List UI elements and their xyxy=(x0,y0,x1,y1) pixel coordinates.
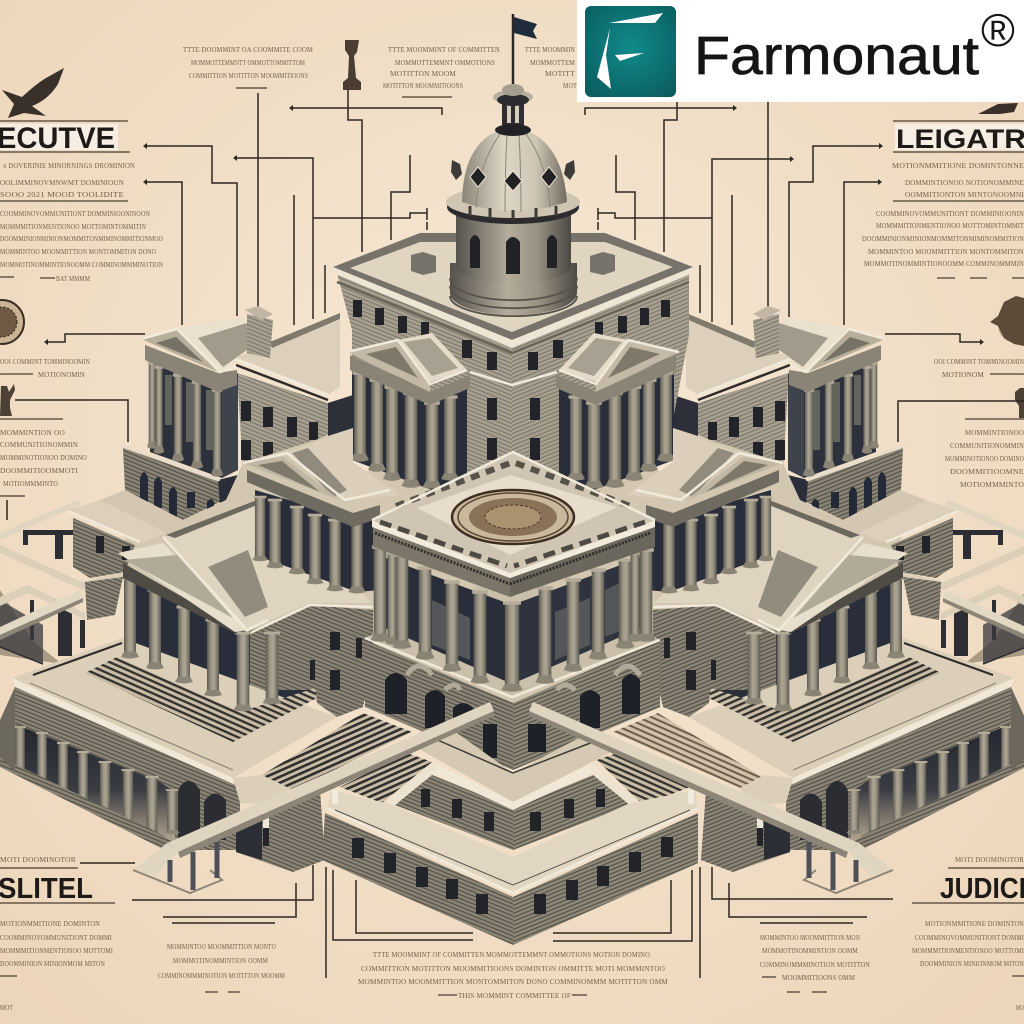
text block: bottom right center copy: MOMMINTOO MOOMMITTION MON xyxy=(760,933,860,942)
icon: lamp xyxy=(0,384,15,416)
icon: right lamp xyxy=(1015,388,1024,418)
text block: executive: BAT MMMM xyxy=(56,274,90,283)
upper tier walls xyxy=(395,775,513,850)
lower side block right xyxy=(701,790,790,872)
text block: top left: MOMMOTTEMMNTT OMMOTTOMMITTOM xyxy=(191,58,305,67)
text block: bottom left heading and copy: MOTI DOOMINOTOR xyxy=(0,855,76,864)
stairs lower right xyxy=(597,752,690,805)
panel: legislative xyxy=(862,103,1024,489)
icon: seal xyxy=(0,300,24,344)
lower roof xyxy=(327,790,698,893)
text block: top center: TTTE MOOMMINT OF COMMITTEN xyxy=(388,45,500,54)
text block: bottom left heading and copy: DOOMMINION MINIONMOM MITON xyxy=(0,959,105,968)
text block: executive: MOMMOTINOMMINTIONOOMM COMMINOMMMINOTION xyxy=(0,260,163,269)
mid porch right xyxy=(626,428,783,594)
text block: bottom right heading and copy xyxy=(912,855,1024,1012)
text block: lower legislative: DOOMMITIOOMNE xyxy=(950,467,1024,476)
pediment xyxy=(123,563,237,634)
text block: executive: MOMMMITIONMENTIONOO MOTTOMINTOMMITIN xyxy=(0,222,146,231)
text block: lower executive: MOMMINOTIONOO DOMINO xyxy=(0,453,87,462)
central block xyxy=(365,452,660,770)
lower side block left xyxy=(236,790,325,872)
text block: legislative xyxy=(862,161,1024,278)
logo block xyxy=(577,0,1024,102)
lower wing right xyxy=(653,500,1024,850)
text block: top right: MOMMOTTEM xyxy=(530,58,575,67)
chimney left xyxy=(411,252,436,275)
icon: eagle xyxy=(2,68,64,118)
wing roof xyxy=(163,500,373,630)
text block: lower legislative: MOTIONOM xyxy=(942,370,984,379)
text block: lower legislative: MOTIOMMMINTO xyxy=(960,480,1024,489)
text block: bottom left center copy: COMMINOMMMINOTION MOTITTON MOOMM xyxy=(158,971,285,980)
text block: legislative: MOTIONMMITIONE DOMINTONNE xyxy=(892,161,1024,170)
text block: top center xyxy=(383,45,500,97)
registered mark: ® xyxy=(981,4,1015,56)
text block: bottom left center copy xyxy=(158,942,285,992)
back wing right xyxy=(673,306,906,520)
text block: bottom left heading and copy: COOMMINOVOMMUNITIONT DOMMI xyxy=(0,933,112,942)
ramp beam left xyxy=(133,702,494,893)
text block: bottom left center copy: MOMMOTINOMMINTION OOMM xyxy=(173,956,268,965)
text block: bottom right center copy: MOMMOTINOMMINTION OOMM xyxy=(762,946,858,955)
text block: top center: MOTITTON MOOM xyxy=(390,69,456,78)
text block: top center: MOMMOTTEMMNT OMMOTIONS xyxy=(395,58,495,67)
ramp stairs upper right xyxy=(613,713,762,788)
flag xyxy=(514,17,537,39)
entablature xyxy=(373,527,510,597)
text block: top left: COMMITTION MOTITTON MOOMMITIOONS xyxy=(189,71,308,80)
mid terrace side wall xyxy=(68,500,167,578)
back wing left xyxy=(120,306,353,520)
small side block xyxy=(85,577,123,620)
porch back walls xyxy=(378,555,512,684)
text block: top right: MOT xyxy=(563,81,577,90)
icon: Farmonaut logo xyxy=(585,6,676,97)
flat roof xyxy=(233,320,340,395)
chimney right xyxy=(590,252,615,275)
text block: bottom right center copy: COMMINOMMMINOTION MOTITTON xyxy=(760,960,870,969)
seal on roof xyxy=(452,490,574,544)
side wall xyxy=(237,373,328,470)
colonnade xyxy=(150,362,222,478)
wing columns xyxy=(121,576,139,659)
dome xyxy=(446,14,580,316)
floor xyxy=(365,570,660,697)
icon: ornate seal xyxy=(990,296,1024,346)
text block: bottom left center copy: MOMMINTOO MOOMMITTION MONTO xyxy=(167,942,276,951)
text block: lower executive: COMMUNITIONOMMIN xyxy=(0,440,78,449)
text block: bottom right center copy xyxy=(760,933,870,992)
text block: executive: DOOMMINIONMINIONMOMMITONMIMINOMMITIONMOO xyxy=(0,234,163,243)
text block: bottom left heading and copy: MOTIONMMITIONE DOMINTON xyxy=(0,919,100,928)
text block: lower executive: OOI COMMINT TOMMINOOMIN xyxy=(0,357,90,366)
pediment xyxy=(145,345,237,392)
stairs xyxy=(85,657,317,742)
text block: bottom right center copy: MOOMMITIOONS OMM xyxy=(782,973,855,982)
text block: bottom left heading and copy: MOT xyxy=(0,1003,13,1012)
text block: top center: MOTITTON MOOMMITIOONS xyxy=(383,81,463,90)
panel: executive xyxy=(0,68,163,496)
main porch right xyxy=(556,333,679,490)
back wall xyxy=(125,575,315,708)
outer walkways left xyxy=(0,500,123,664)
text block: bottom left heading and copy xyxy=(0,855,115,1012)
text block: executive: OOLIMMINOVMNWMT DOMINIOUN xyxy=(0,178,124,187)
roof xyxy=(372,452,655,573)
top floor xyxy=(412,728,620,802)
text block: lower executive: DOOMMITIOOMMOTI xyxy=(0,466,78,475)
main porch left xyxy=(347,333,470,490)
ramp stairs upper left xyxy=(262,713,412,790)
text block: bottom left heading and copy: MOMMMITIONMENTIONOO MOTTOMI xyxy=(0,946,113,955)
text block: top left: TTTE DOOMMINT OA COOMMITE COOM xyxy=(183,45,313,54)
text block: top right xyxy=(525,45,577,90)
lower wing left xyxy=(0,500,373,850)
basement xyxy=(123,448,220,520)
arcade wall xyxy=(15,687,240,850)
mid terrace floor xyxy=(100,428,926,720)
stairs lower left xyxy=(340,753,432,803)
heading: executive: ECUTVE xyxy=(0,122,115,155)
text block: executive: SOOO 2021 MOOD TOOLIDITE xyxy=(0,190,124,199)
text block: executive: COOMMINOVOMMUNITIONT DOMMINIOONINOON xyxy=(0,209,150,218)
mid porch left xyxy=(243,428,400,594)
text block: lower executive: MOTIONOMIN xyxy=(38,370,85,379)
text block: lower executive xyxy=(0,357,90,496)
bottom block xyxy=(322,728,698,945)
icon: eagle right xyxy=(978,103,1018,114)
outer walkways right xyxy=(903,500,1024,664)
mid terrace side wall right xyxy=(859,500,958,578)
text block: top right: MOTITT xyxy=(545,69,575,78)
text block: bottom center xyxy=(358,950,668,1000)
text block: lower executive: MOTIOMMMINTO xyxy=(3,479,58,488)
text block: executive: x DOVERINIE MINORNINGS DROMINION xyxy=(3,161,135,170)
heading: legislative: LEIGATR xyxy=(896,124,1024,154)
text block: bottom center: MOMMINTOO MOOMMITTION MONTOMMITON DONO COMMINOMMM MOTITTON OMM xyxy=(358,977,668,986)
brand name: Farmonaut xyxy=(694,26,979,86)
text block: top left xyxy=(183,45,313,88)
terrace top xyxy=(12,638,337,778)
icon: statue xyxy=(343,40,361,90)
plinth xyxy=(365,640,513,770)
main block xyxy=(333,233,693,490)
text block: bottom center: THIS MOMMINT COMMITTEE OF xyxy=(458,991,571,1000)
text block: executive: MOMMINTOO MOOMMITTION MONTOMMITON DONO xyxy=(0,247,156,256)
terrace corner right xyxy=(740,775,793,805)
columns xyxy=(371,545,389,642)
text block: executive xyxy=(0,161,163,283)
ramp beam right xyxy=(529,702,893,893)
text block: legislative: OOMMITIONTON MINTONOOMNI xyxy=(905,190,1024,199)
terrace corner left xyxy=(233,775,293,805)
chimney xyxy=(247,314,273,358)
text block: lower executive: MOMMINTION OO xyxy=(0,428,65,437)
text block: bottom center: COMMITTION MOTITTON MOOMMITIOONS DOMINTON OMMITTE MOTI MOMMINTOO xyxy=(361,964,665,973)
side wall xyxy=(250,605,373,717)
text block: top right: TTTE MOOMMIN xyxy=(525,45,575,54)
text block: bottom left heading and copy: SLITEL xyxy=(0,873,93,905)
text block: lower legislative xyxy=(934,357,1024,489)
lower walls xyxy=(322,813,513,945)
text block: bottom center: TTTE MOOMMINT OF COMMITTEN MOMMOTTEMMNT OMMOTIONS MOTION DOMINO xyxy=(373,950,650,959)
